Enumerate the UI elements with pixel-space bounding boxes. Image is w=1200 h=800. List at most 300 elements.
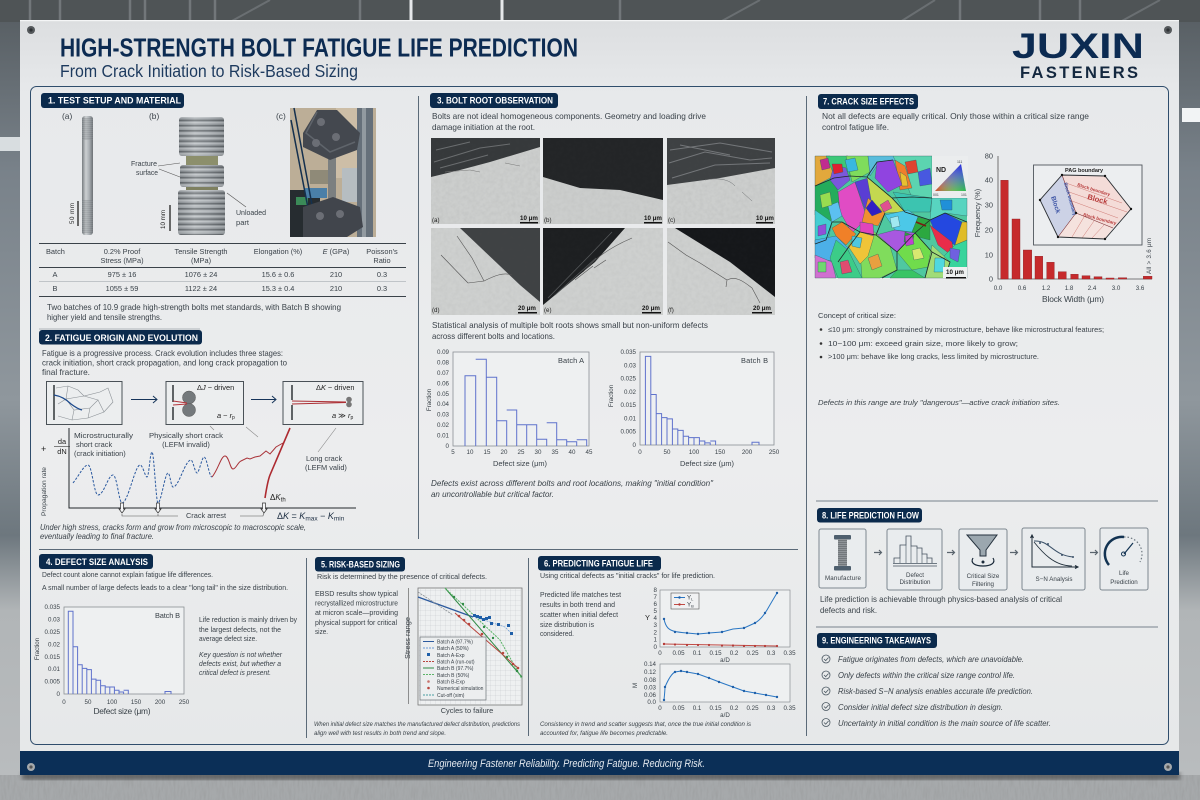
block width bar chart: Frequency (%) (973, 189, 982, 237)
block width bar chart: 1.8 (1065, 285, 1074, 292)
material properties table: 0.2% Proof (104, 247, 141, 256)
image (c): test rig photo (276, 108, 376, 237)
micrograph (b): 10 μm (644, 215, 662, 222)
block boundary inset: Block boundary (1063, 182, 1077, 216)
histogram: batch B: 0.015 (621, 402, 637, 409)
block width bar chart: 40 (985, 176, 993, 184)
micrograph (b): (b) (544, 217, 552, 224)
chart: Y vs a/D: L (691, 596, 694, 602)
SEM micrographs (431, 138, 775, 315)
chart: Y vs a/D: 8 (654, 587, 658, 594)
block width bar chart: 80 (985, 152, 993, 160)
IPF colour key: ND (936, 167, 946, 174)
histogram: batch A: 0.04 (437, 401, 450, 408)
heading 3 (430, 93, 558, 108)
crack propagation chart: Crack arrest (186, 511, 226, 520)
histogram: batch B: 50 (664, 449, 671, 456)
flow step: life prediction: Life (1119, 570, 1130, 577)
section 2 intro text: crack initiation, short crack propagation, and long crack propagation to (42, 358, 287, 368)
panel: 7 crack size effects (815, 94, 1153, 407)
section 6 text (540, 571, 715, 638)
histogram: batch B: 0.03 (624, 362, 637, 370)
section 3 statistics text: across different bolts and locations. (432, 331, 555, 341)
section 5 text: at micron scale—providing (315, 608, 398, 617)
chart: M vs a/D: 0.25 (746, 705, 759, 712)
schematic: delta K driven: ΔK − driven (316, 383, 354, 392)
flow step: S-N analysis: S−N Analysis (1036, 576, 1072, 583)
image (c): test rig photo: (c) (276, 111, 286, 121)
block boundary inset: Block boundary (1077, 182, 1111, 197)
histogram: batch B tail: 0 (57, 691, 61, 698)
histogram: batch B: 0.005 (621, 428, 637, 436)
section 4 side text: the largest defects, not the (199, 625, 281, 634)
block width bar chart: Block Width (μm) (1042, 294, 1104, 304)
section 8 text (820, 594, 1062, 615)
material properties table: 15.3 ± 0.4 (262, 284, 294, 293)
micrograph (d): (d) (432, 307, 440, 314)
chart: M vs a/D: 0 (658, 705, 662, 712)
image (b): fractured bolt (131, 111, 266, 235)
takeaway 2: Only defects within the critical size range control life. (838, 670, 1015, 680)
section 3 statistics text: Statistical analysis of multiple bolt roots shows small but non-uniform defects (432, 320, 708, 330)
micrograph (a): 10 μm (520, 215, 538, 222)
crack propagation chart: Physically short crack (149, 431, 223, 440)
block width bar chart: All > 3.6 μm (1146, 238, 1153, 274)
histogram: batch A: 30 (535, 449, 542, 456)
histogram: batch A: 0.01 (437, 432, 450, 440)
heading 4: 4. DEFECT SIZE ANALYSIS (46, 557, 148, 567)
material properties table: E (GPa) (323, 247, 349, 256)
histogram: batch A: 0.09 (437, 349, 450, 356)
block width bar chart: 0.6 (1018, 285, 1027, 292)
section 4 text: A small number of large defects leads to a clear "long tail" in the size distribution. (42, 583, 288, 592)
block width bar chart: 3.0 (1112, 285, 1121, 292)
block boundary inset: Block (1086, 192, 1109, 206)
material properties table: 15.6 ± 0.6 (262, 270, 294, 279)
image (b): fractured bolt: part (236, 218, 249, 227)
arrow (131, 396, 157, 403)
histogram: batch B: 0.01 (624, 416, 637, 422)
chart: Y vs a/D: Y (687, 602, 691, 608)
section 2 intro text: final fracture. (42, 367, 90, 377)
material properties table: Ratio (373, 256, 391, 265)
footer bar: Engineering Fastener Reliability. Predicting Fatigue. Reducing Risk. (428, 758, 705, 770)
schematic: delta J driven: ΔJ − driven (197, 383, 234, 392)
flow step: critical size filtering: Filtering (972, 581, 995, 588)
histogram: batch A: Defect size (μm) (493, 459, 547, 468)
histogram: batch B: 100 (689, 449, 700, 456)
block boundary inset: PAG boundary (1065, 168, 1104, 174)
section 6 text: scatter when initial defect (540, 610, 618, 619)
histogram: batch B tail: 50 (85, 699, 92, 706)
micrograph (f): 20 μm (753, 305, 771, 312)
micrograph (c): 10 μm (756, 215, 774, 222)
takeaway 3: Risk-based S−N analysis enables accurate life prediction. (838, 686, 1033, 696)
chart: Y vs a/D: B (691, 604, 694, 608)
chart: Y vs a/D: 6 (654, 601, 658, 608)
S-N chart legend (420, 637, 486, 700)
histogram: batch A: Fraction (426, 388, 433, 411)
section 3 intro text (432, 111, 706, 132)
section 2 intro text: Fatigue is a progressive process. Crack evolution includes three stages: (42, 348, 283, 358)
block width bar chart: 20 (985, 226, 993, 234)
crack propagation chart: ΔK (270, 493, 281, 502)
section 8 text: defects and risk. (820, 605, 877, 615)
flow step: manufacture (819, 529, 866, 588)
histogram: batch B tail: 0.01 (48, 666, 61, 673)
heading 1 (41, 93, 184, 108)
chart: Y vs a/D: 0.1 (693, 650, 702, 657)
heading 7: 7. CRACK SIZE EFFECTS (823, 96, 914, 106)
histogram: batch A: 45 (586, 449, 593, 456)
takeaway 5: Uncertainty in initial condition is the main source of life scatter. (838, 718, 1051, 728)
chart: Y vs a/D: 0.2 (730, 650, 739, 657)
histogram: batch A: 0.03 (437, 412, 450, 418)
histogram: batch A: 0.08 (437, 360, 450, 366)
logo: FASTENERS (1020, 64, 1138, 82)
content frame (30, 86, 1168, 744)
S-N chart legend: Numerical simulation (437, 686, 484, 692)
section 2 caption: Under high stress, cracks form and grow from microscopic to macroscopic scale, (40, 522, 306, 532)
crack propagation chart: ΔK = K (277, 511, 305, 521)
section 6 text: size distribution is (540, 620, 594, 629)
histogram: batch B: 0 (638, 449, 642, 456)
flow step: defect distribution (887, 529, 942, 590)
histogram: batch B tail: 100 (107, 699, 118, 706)
histogram: batch A: 15 (484, 449, 491, 456)
crack propagation chart: short crack (76, 440, 112, 449)
critical size concept list: 10−100 μm: exceed grain size, more likely to grow; (828, 339, 1018, 348)
material properties table: 0.3 (377, 284, 387, 293)
heading 9 (817, 633, 937, 648)
chart: M vs a/D: 0.3 (767, 705, 776, 712)
heading 3: 3. BOLT ROOT OBSERVATION (437, 96, 553, 106)
chart: M vs a/D: 0.15 (709, 705, 722, 712)
histogram: batch A: 0.02 (437, 422, 450, 429)
histogram: batch B: 0.02 (624, 389, 637, 396)
heading 6: 6. PREDICTING FATIGUE LIFE (544, 558, 653, 568)
S-N chart legend: Cut-off (sim) (437, 693, 465, 699)
chart: Y vs a/D: 0.25 (746, 650, 759, 657)
S-N chart legend: Batch B (97.7%) (437, 666, 474, 672)
chart: Y vs a/D: 0.3 (767, 650, 776, 657)
section 7 caption: Defects in this range are truly "dangerous"—active crack initiation sites. (818, 398, 1060, 407)
image (a): full bolt: 50 mm (69, 203, 76, 224)
section 5 text: Risk is determined by the presence of critical defects. (317, 572, 487, 581)
chart: Y vs a/D: Y (687, 594, 691, 602)
section 5 text (315, 572, 487, 636)
heading 5: 5. RISK-BASED SIZING (321, 560, 400, 570)
block boundary inset: Block boundary (1083, 212, 1117, 226)
block boundary inset (1034, 165, 1142, 245)
IPF colour key: 111 (957, 160, 962, 164)
board shadow (22, 772, 1180, 780)
block width bar chart: 0 (989, 274, 993, 284)
flow step: critical size filtering (959, 529, 1007, 590)
histogram: batch A: 20 (501, 449, 508, 456)
material properties table: Poisson's (366, 247, 398, 256)
panel: 4 defect size analysis (34, 554, 297, 716)
chart: Y vs a/D: 7 (654, 594, 658, 601)
histogram: batch A: 35 (552, 449, 559, 456)
chart: M vs a/D: 0.1 (693, 705, 702, 712)
histogram: batch B: 250 (769, 449, 780, 456)
micrograph (f) (667, 228, 775, 315)
section 6 text: Predicted life matches test (540, 590, 621, 599)
histogram: batch B: Batch B (741, 356, 768, 365)
histogram: batch A: 10 (467, 449, 474, 456)
histogram: batch B tail: 0.025 (45, 629, 61, 636)
panel: 2 fatigue origin and evolution (39, 330, 363, 541)
section 2 caption (40, 522, 306, 541)
histogram: batch B tail: 200 (155, 699, 166, 706)
S-N chart legend: Batch A (50%) (437, 646, 469, 652)
chart: M vs a/D (632, 661, 796, 719)
micrograph (c): (c) (668, 217, 675, 224)
block width bar chart: 1.2 (1042, 285, 1051, 292)
section 3 caption (431, 478, 714, 499)
chart: Y vs a/D: 2 (654, 630, 658, 636)
chart: Y vs a/D: 0.05 (672, 650, 685, 657)
image (b): fractured bolt: Unloaded (236, 208, 266, 217)
image (a): full bolt (62, 111, 93, 235)
histogram: batch A: 0.05 (437, 391, 450, 398)
crack propagation chart: da (58, 437, 67, 446)
section 5 text: recrystallized microstructure (315, 598, 398, 608)
histogram: batch A: 40 (569, 449, 576, 456)
section 3 statistics text (432, 320, 708, 341)
section 5 caption: align well with test results in both trend and slope. (314, 730, 446, 737)
IPF colour key: 001 (933, 193, 939, 197)
IPF colour key: 101 (961, 193, 967, 197)
histogram: batch B: Fraction (608, 384, 615, 407)
chart: M vs a/D: a/D (720, 712, 730, 719)
material properties table: 1076 ± 24 (185, 270, 217, 279)
micrograph (a): (a) (432, 217, 440, 224)
heading 9: 9. ENGINEERING TAKEAWAYS (822, 636, 931, 646)
section 6 caption: Consistency in trend and scatter suggests that, once the true initial condition is (540, 721, 751, 728)
histogram: batch B tail: 250 (179, 699, 190, 706)
micrograph (e): (e) (544, 307, 552, 314)
section 5 text: EBSD results show typical (315, 589, 398, 598)
flow step: defect distribution: Distribution (900, 579, 931, 586)
section 4 side text: defects exist, but whether a (199, 659, 281, 668)
histogram: batch B tail: Fraction (34, 637, 41, 660)
schematic: microstructural crack (46, 382, 122, 424)
flow step: critical size filtering: Critical Size (967, 573, 1000, 580)
section 3 intro text: damage initiation at the root. (432, 122, 535, 132)
section 1 text: higher yield and tensile strengths. (47, 312, 162, 322)
block width bar chart: 2.4 (1088, 285, 1097, 292)
section 4 text: Defect count alone cannot explain fatigue life differences. (42, 570, 213, 579)
panel: 9 engineering takeaways (817, 633, 1051, 728)
histogram: batch A: 0.07 (437, 370, 450, 377)
heading 8 (817, 508, 922, 522)
critical size concept list: >100 μm: behave like long cracks, less limited by microstructure. (828, 352, 1039, 361)
histogram: batch B tail: Batch B (155, 611, 180, 620)
crack propagation chart: K (328, 511, 335, 521)
section 2 intro text (42, 348, 287, 377)
image (b): fractured bolt: Fracture (131, 159, 157, 168)
section 3 intro text: Bolts are not ideal homogeneous components. Geometry and loading drive (432, 111, 706, 121)
histogram: batch A: 0.06 (437, 380, 450, 388)
micrograph (a) (431, 138, 540, 224)
title: HIGH-STRENGTH BOLT FATIGUE LIFE PREDICTION (60, 32, 578, 62)
S-N chart legend: Batch B-Exp (437, 680, 465, 686)
EBSD map: 10 μm (946, 269, 964, 276)
crack propagation chart: max (305, 516, 318, 522)
histogram: batch B: 0.025 (621, 376, 637, 382)
histogram: batch B tail: 0.03 (48, 616, 61, 624)
micrograph (c) (667, 138, 775, 224)
schematic: delta K driven: a ≫ r (332, 411, 350, 420)
histogram: batch B tail (34, 604, 190, 716)
block width bar chart: 0.0 (994, 285, 1003, 292)
S-N chart legend: Batch B (50%) (437, 673, 470, 679)
histogram: batch B tail: 0.035 (45, 604, 61, 611)
chart: Y vs a/D: 0.15 (709, 650, 722, 657)
material properties table: A (53, 270, 58, 279)
heading 1: 1. TEST SETUP AND MATERIAL (48, 96, 182, 106)
S-N chart: Cycles to failure (441, 706, 493, 715)
material properties table (39, 244, 406, 296)
section 1 text: Two batches of 10.9 grade high-strength bolts met standards, with Batch B showing (47, 302, 341, 312)
panel: 1 test setup and material (39, 93, 406, 322)
chart: Y vs a/D: Y (645, 613, 650, 622)
schematic: delta K driven (283, 382, 363, 424)
section 4 side text: Life reduction is mainly driven by (199, 615, 297, 624)
chart: M vs a/D: 0.08 (644, 677, 657, 684)
chart: M vs a/D: 0.12 (644, 669, 657, 676)
image (a): full bolt: (a) (62, 111, 72, 121)
critical size concept list (818, 311, 1104, 361)
chart: Y vs a/D: 0 (654, 644, 658, 651)
histogram: batch B: 0.035 (621, 349, 637, 356)
micrograph (d) (431, 228, 540, 315)
chart: M vs a/D: 0.0 (647, 699, 657, 706)
chart: Y vs a/D: 3 (654, 622, 658, 629)
material properties table: Batch (46, 247, 65, 256)
panel: 6 predicting fatigue life (538, 556, 796, 737)
histogram: batch B tail: 0.02 (48, 642, 61, 648)
panel: 5 risk-based sizing (314, 557, 522, 737)
histogram: batch B (608, 349, 780, 468)
subtitle: From Crack Initiation to Risk-Based Sizing (60, 61, 358, 81)
material properties table: Elongation (%) (254, 247, 302, 256)
heading 5 (315, 557, 405, 572)
histogram: batch B: 0 (633, 442, 637, 449)
S-N chart legend: Batch A (97.7%) (437, 640, 473, 646)
panel: 3 bolt root observation (426, 93, 780, 499)
chart: Y vs a/D: 1 (654, 636, 658, 644)
image (b): fractured bolt: surface (136, 168, 158, 177)
panel: 8 life prediction flow (817, 508, 1148, 615)
section 4 text (42, 570, 288, 592)
block boundary inset: Block (1049, 195, 1061, 215)
histogram: batch B tail: 0.015 (45, 654, 61, 661)
block width bar chart: 30 (985, 200, 993, 210)
section 8 text: Life prediction is achievable through physics-based analysis of critical (820, 594, 1062, 604)
histogram: batch A: 5 (451, 449, 455, 456)
heading 2: 2. FATIGUE ORIGIN AND EVOLUTION (45, 333, 198, 343)
crack propagation chart: (LEFM valid) (305, 463, 347, 472)
chart: M vs a/D: 0.35 (783, 705, 796, 712)
material properties table: 210 (330, 270, 342, 279)
heading 4 (39, 554, 153, 569)
histogram: batch B tail: Defect size (μm) (94, 706, 151, 716)
chart: M vs a/D: 0.2 (730, 705, 739, 712)
section 3 caption: Defects exist across different bolts and root locations, making "initial condition" (431, 478, 714, 488)
micrograph (f): (f) (668, 307, 674, 314)
material properties table: 1055 ± 59 (106, 284, 138, 293)
section 7 intro text (822, 111, 1089, 132)
heading 7 (818, 94, 918, 109)
chart: M vs a/D: 0.03 (644, 684, 657, 692)
material properties table: (MPa) (191, 256, 211, 265)
material properties table: 1122 ± 24 (185, 284, 217, 293)
heading 8: 8. LIFE PREDICTION FLOW (822, 510, 920, 520)
micrograph (e): 20 μm (642, 305, 660, 312)
critical size concept list: Concept of critical size: (818, 311, 896, 320)
section 4 side text: average defect size. (199, 634, 257, 643)
material properties table: 0.3 (377, 270, 387, 279)
schematic: delta J driven: p (232, 415, 235, 421)
section 5 caption (314, 721, 520, 737)
histogram: batch B tail: 150 (131, 699, 142, 706)
chart: Y vs a/D (645, 587, 796, 664)
schematic: delta J driven: a ~ r (217, 411, 232, 420)
footer bar (20, 751, 1179, 775)
material properties table: B (53, 284, 58, 293)
image (b): fractured bolt: 10 mm (160, 210, 167, 229)
chart: M vs a/D: 0.14 (644, 661, 657, 668)
section 7 intro text: Not all defects are equally critical. Only those within a critical size range (822, 111, 1089, 121)
critical size concept list: ≤10 μm: strongly constrained by microstructure, behave like microstructural features; (828, 325, 1104, 334)
chart: M vs a/D: M (632, 683, 639, 688)
histogram: batch B: Defect size (μm) (680, 459, 734, 468)
crack propagation chart: Long crack (306, 454, 342, 463)
crack propagation chart: + (41, 444, 46, 454)
block width bar chart: 10 (985, 250, 993, 260)
block width bar chart (973, 152, 1153, 304)
arrow (251, 396, 276, 403)
histogram: batch A: 25 (518, 449, 525, 456)
crack propagation chart: Microstructurally (74, 431, 133, 440)
heading 6 (538, 556, 661, 570)
dividers (39, 96, 1158, 738)
section 4 side text: critical defect is present. (199, 668, 271, 677)
material properties table: 210 (330, 284, 342, 293)
image (b): fractured bolt: (b) (149, 111, 159, 121)
chart: Y vs a/D: a/D (720, 657, 730, 664)
arrow (1010, 550, 1018, 555)
section 4 side text: Key question is not whether (199, 650, 282, 659)
micrograph (b) (543, 138, 663, 224)
IPF colour key (932, 156, 968, 198)
S-N chart legend: Batch A (run-out) (437, 660, 475, 666)
heading 2 (39, 330, 202, 344)
chart: Y vs a/D: 0 (658, 650, 662, 657)
histogram: batch A: Batch A (558, 356, 584, 365)
section 6 caption (540, 721, 751, 737)
section 6 caption: accounted for, fatigue life becomes predictable. (540, 730, 668, 737)
crack propagation chart: min (334, 516, 345, 522)
takeaway 4: Consider initial defect size distribution in design. (838, 702, 1003, 712)
chart: M vs a/D: 0.06 (644, 692, 657, 699)
chart: M vs a/D: 0.05 (672, 705, 685, 712)
flow step: manufacture: Manufacture (825, 575, 862, 582)
histogram: batch B tail: 0 (62, 699, 66, 706)
